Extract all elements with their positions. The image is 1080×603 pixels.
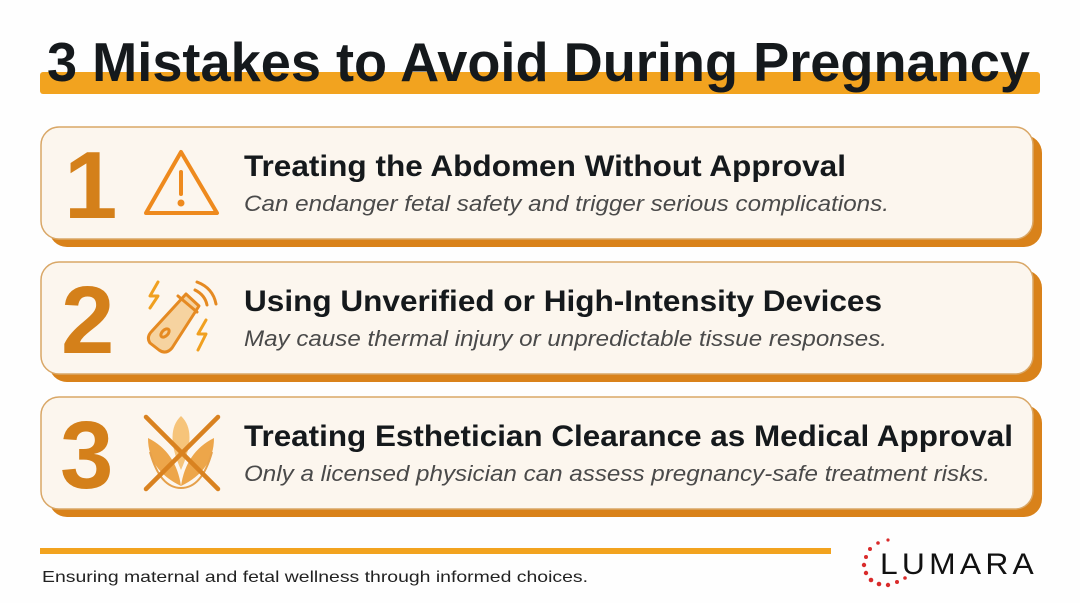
panel: mistake 3 (41, 397, 1042, 517)
number 2: 2 (61, 267, 114, 374)
logo: Lumara: LUMARA (880, 548, 1038, 581)
heading 1: Treating the Abdomen Without Approval (244, 150, 846, 183)
description 3: Only a licensed physician can assess pregnancy-safe treatment risks. (244, 461, 990, 486)
number 3: 3 (60, 402, 113, 509)
heading 2: Using Unverified or High-Intensity Devices (244, 285, 882, 318)
panel: mistake 1 (41, 127, 1042, 247)
description 1: Can endanger fetal safety and trigger serious complications. (244, 191, 889, 216)
panel: mistake 2 (41, 262, 1042, 382)
description 2: May cause thermal injury or unpredictable tissue responses. (244, 326, 887, 351)
icon: device (148, 282, 216, 352)
icon: crossed leaves (146, 416, 218, 489)
heading 3: Treating Esthetician Clearance as Medical Approval (244, 420, 1013, 453)
footer line (40, 548, 831, 554)
logo: Lumara (862, 538, 1038, 587)
footer text: Ensuring maternal and fetal wellness through informed choices. (42, 569, 588, 586)
icon: warning triangle (146, 152, 217, 213)
title: 3 Mistakes to Avoid During Pregnancy (47, 31, 1030, 93)
number 1: 1 (64, 132, 117, 239)
